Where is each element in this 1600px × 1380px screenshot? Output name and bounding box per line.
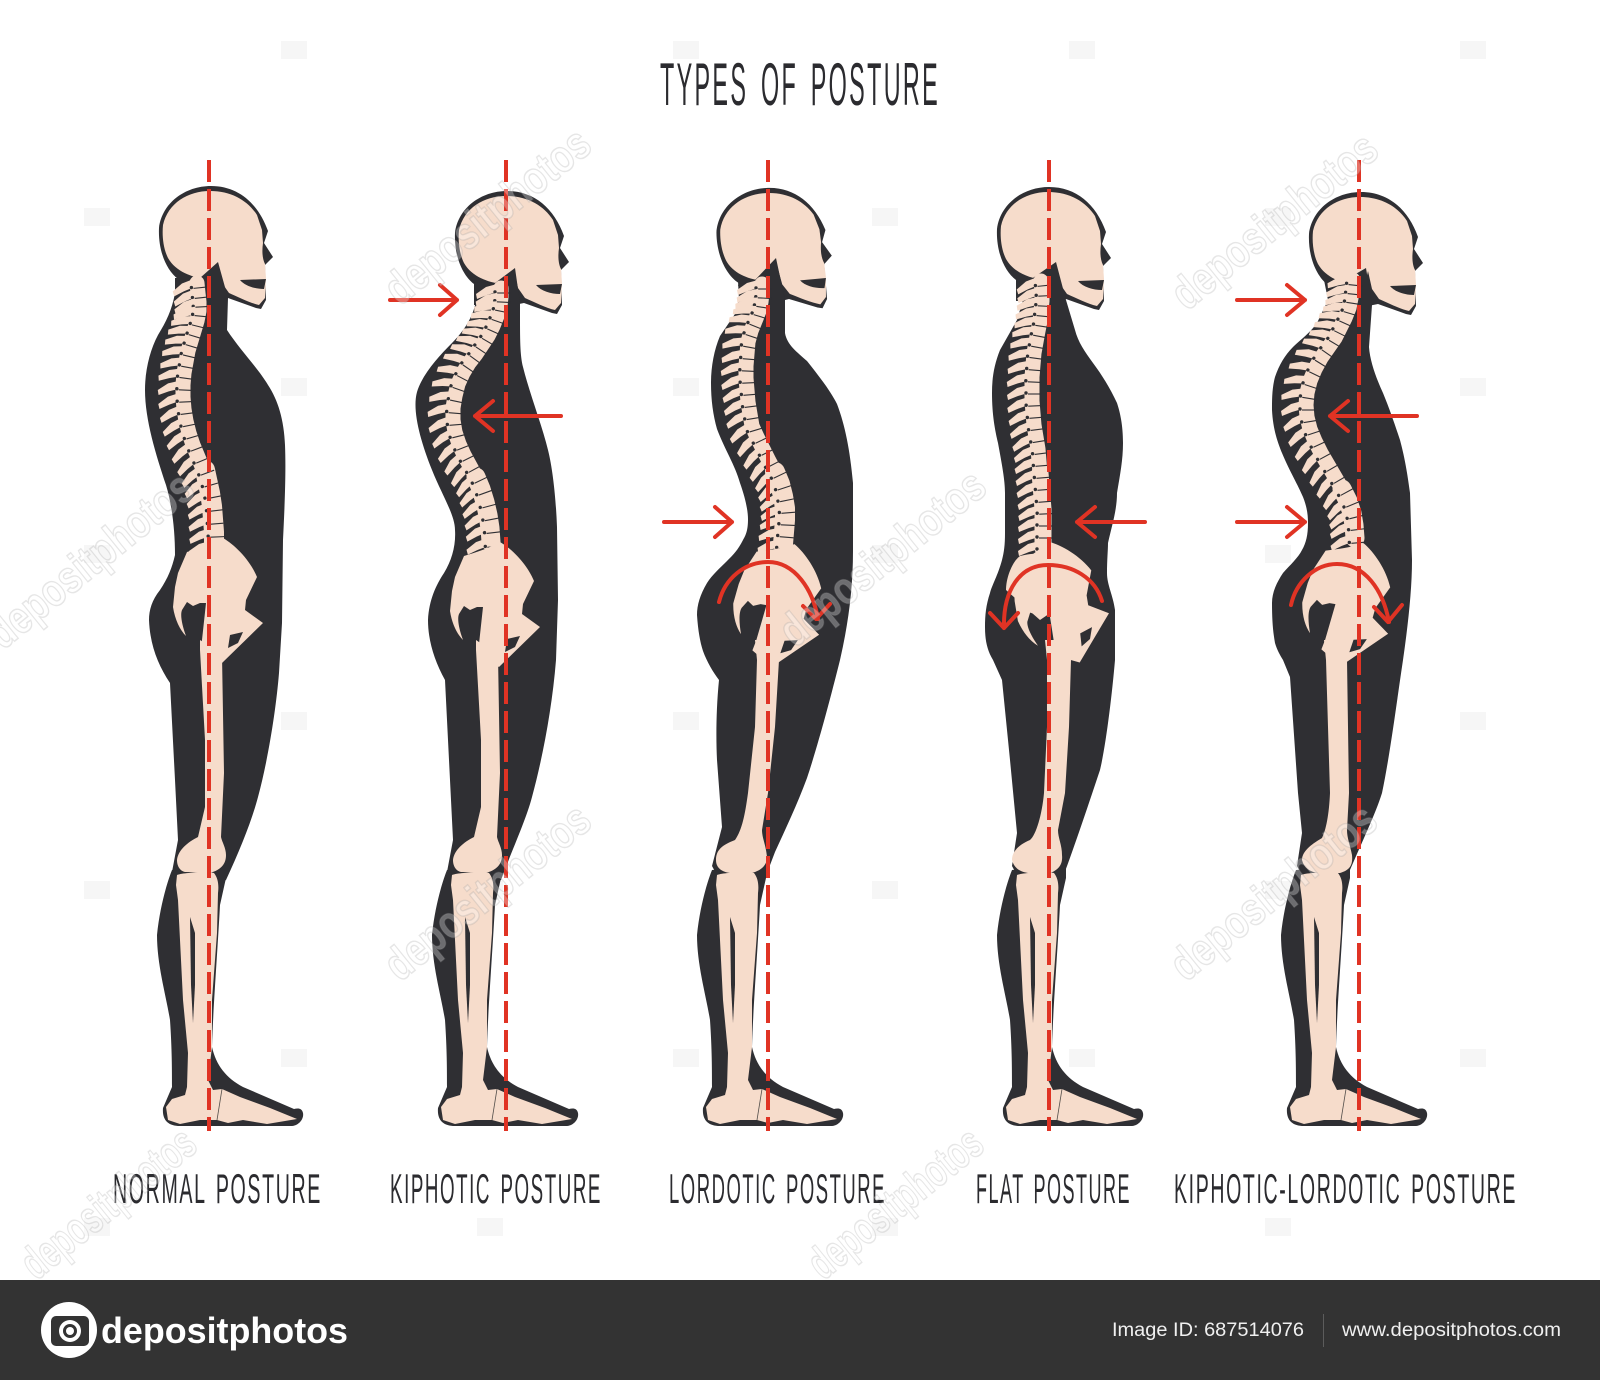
diagonal watermarks: depositphotos [10,1116,206,1289]
diagonal watermarks: depositphotos [1159,793,1386,990]
plumb line [1047,160,1051,1131]
arrow: lower back [1237,507,1305,537]
image id: Image ID: 687514076 [1112,1320,1304,1341]
background watermark camera marks [84,41,1486,1236]
figure: kiphotic posture [390,160,578,1131]
spine [453,288,501,542]
diagonal watermarks [0,117,1387,1289]
arrow: upper back [475,401,561,431]
figure: flat posture [985,160,1145,1131]
plumb line [504,160,508,1131]
spine [746,284,785,544]
diagonal watermarks: depositphotos [797,1116,993,1289]
spine [183,283,214,545]
femur [177,640,226,873]
body silhouette [1272,268,1412,890]
arrow: upper back [1330,401,1417,431]
figure: normal posture [145,160,303,1131]
arrow: neck [390,285,457,315]
site url: www.depositphotos.com [1341,1320,1561,1341]
plumb line [766,160,770,1131]
text: LORDOTIC POSTURE [669,1165,886,1212]
body silhouette [985,262,1123,890]
text: KIPHOTIC POSTURE [390,1165,602,1212]
ilium upper fill [1006,554,1087,620]
spine [1032,281,1043,548]
figure: lordotic posture [664,160,853,1131]
body silhouette [415,268,558,890]
logo wordmark: depositphotos [101,1310,348,1351]
femur [1302,640,1352,873]
diagonal watermarks: depositphotos [768,459,995,656]
diagonal watermarks: depositphotos [373,117,600,314]
diagonal watermarks: depositphotos [1160,122,1387,319]
text: TYPES OF POSTURE [660,51,940,118]
text: FLAT POSTURE [976,1165,1131,1212]
footer bar [0,1280,1600,1380]
arrow: neck [1237,285,1305,315]
arrow: lower back [664,507,732,537]
arrow: pelvic tilt [990,565,1102,628]
body silhouette [145,262,285,890]
arrow: pelvic tilt [719,562,830,619]
femur [716,640,780,873]
logo icon: camera [41,1302,97,1358]
arrow: lower back [1077,507,1145,537]
femur [453,640,502,873]
plumb line [1357,160,1361,1131]
spine [1306,280,1355,538]
femur [1012,640,1072,873]
arrow: pelvic tilt [1291,564,1402,622]
body silhouette [697,258,853,890]
diagonal watermarks: depositphotos [373,793,600,990]
text: NORMAL POSTURE [113,1165,322,1212]
plumb line [207,160,211,1131]
figure: kiphotic-lordotic posture [1237,160,1427,1131]
